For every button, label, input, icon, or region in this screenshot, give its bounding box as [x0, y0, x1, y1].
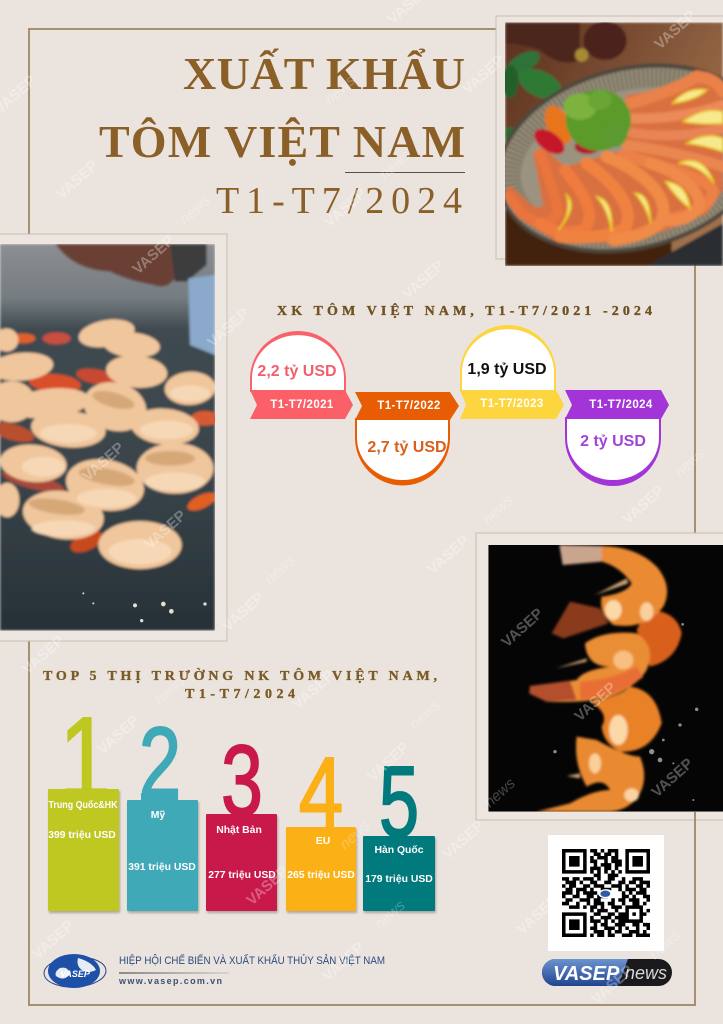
bar 3: 277 triệu USD	[208, 870, 276, 881]
watermarks: VASEP	[321, 185, 370, 231]
bar 2	[127, 707, 198, 911]
bar 5	[363, 746, 435, 911]
title underline	[345, 172, 465, 173]
bar 1: 1	[59, 694, 111, 823]
watermarks: VASEP	[141, 507, 190, 553]
heading: export value: XK TÔM VIỆT NAM, T1-T7/2021 -2024	[277, 302, 652, 319]
bar 4: 265 triệu USD	[287, 870, 355, 881]
footer: website: www.vasep.com.vn	[118, 976, 222, 986]
watermarks: VASEP	[364, 739, 413, 785]
badge 2021: 2,2 tỷ USD	[257, 363, 337, 380]
watermarks: VASEP	[53, 157, 102, 203]
bar 3: Nhật Bản	[216, 825, 262, 836]
bar 5: Hàn Quốc	[374, 844, 424, 856]
bar 2: Mỹ	[151, 810, 165, 821]
bar 1: Trung Quốc&HK	[48, 799, 118, 811]
watermarks: VASEP	[459, 52, 508, 98]
footer: divider	[119, 972, 229, 974]
heading: top 5 markets: T1-T7/2024	[185, 687, 295, 702]
badge 2021	[250, 331, 353, 419]
badge 2023	[460, 325, 564, 419]
title	[99, 47, 465, 167]
photo: shrimp skewer	[488, 545, 723, 812]
panel: top right photo frame	[496, 16, 723, 300]
watermarks: news	[336, 817, 374, 853]
watermarks: VASEP	[399, 257, 448, 303]
timeline chart	[250, 325, 669, 486]
logo: VASEP association: VASEP	[60, 969, 91, 979]
watermarks: VASEP	[588, 962, 637, 1008]
watermarks: VASEP	[513, 892, 562, 938]
bar 1: 399 triệu USD	[48, 830, 116, 841]
badge 2024: 2 tỷ USD	[580, 433, 646, 450]
logo: VASEP association	[43, 954, 107, 989]
watermarks: news	[151, 672, 189, 708]
badge 2023: 1,9 tỷ USD	[467, 361, 547, 378]
watermarks: VASEP	[219, 589, 268, 635]
watermarks: VASEP	[204, 305, 253, 351]
bar 3: 3	[221, 724, 263, 836]
watermarks: news	[406, 697, 444, 733]
badge 2024: T1-T7/2024	[589, 399, 653, 411]
panel: bottom right photo frame	[476, 533, 723, 850]
badge 2022: 2,7 tỷ USD	[367, 439, 447, 456]
badge 2024	[565, 390, 669, 486]
watermarks: news	[671, 445, 709, 481]
watermarks: VASEP	[19, 632, 68, 678]
watermarks: VASEP	[651, 7, 700, 53]
watermarks: VASEP	[498, 605, 547, 651]
panel: griddle photo frame	[0, 234, 227, 641]
bar 2: 2	[139, 707, 181, 818]
bar 1	[48, 694, 119, 911]
QR code	[548, 835, 664, 951]
watermarks: VASEP	[94, 712, 143, 758]
watermarks: VASEP	[319, 939, 368, 985]
logo: VASEP news badge: VASEP	[553, 963, 620, 985]
watermarks: VASEP	[424, 532, 473, 578]
badge 2022: T1-T7/2022	[377, 400, 441, 412]
watermarks: VASEP	[243, 863, 292, 909]
bar 5: 179 triệu USD	[365, 874, 433, 885]
watermarks: VASEP	[29, 917, 78, 963]
footer: association name: HIỆP HỘI CHẾ BIẾN VÀ XUẤT KHẨU THỦY SẢN VIỆT NAM	[119, 954, 385, 967]
badge 2021: T1-T7/2021	[270, 399, 334, 411]
photo: grilled shrimp	[0, 244, 219, 631]
watermarks: VASEP	[79, 439, 128, 485]
logo: VASEP news badge: news	[625, 963, 667, 983]
photo: shrimp platter	[505, 22, 723, 266]
bar 3	[206, 724, 277, 911]
bar 4: 4	[299, 738, 343, 849]
bar 2: 391 triệu USD	[128, 862, 196, 873]
watermarks: VASEP	[129, 232, 178, 278]
bar 4	[286, 738, 356, 911]
watermarks: news	[261, 552, 299, 588]
badge 2023: T1-T7/2023	[480, 398, 544, 410]
bar 5: 5	[379, 746, 419, 858]
logo: VASEP news badge	[542, 959, 672, 986]
badge 2022	[355, 392, 459, 486]
bar chart: top 5 markets	[48, 694, 435, 911]
watermarks: VASEP	[619, 482, 668, 528]
heading: top 5 markets	[43, 667, 437, 702]
watermarks: VASEP	[439, 817, 488, 863]
watermarks: VASEP	[289, 667, 338, 713]
watermarks: news	[321, 72, 359, 108]
watermarks: VASEP	[571, 679, 620, 725]
bar 4: EU	[316, 836, 330, 847]
watermarks: VASEP	[648, 755, 697, 801]
watermarks: news	[371, 897, 409, 933]
subtitle: period: T1-T7/2024	[216, 180, 462, 222]
watermarks: news	[376, 147, 414, 183]
watermarks: news	[479, 492, 517, 528]
title: XUẤT KHẨU	[183, 47, 465, 99]
watermarks: news	[481, 775, 519, 811]
title: TÔM VIỆT NAM	[99, 116, 465, 167]
heading: top 5 markets: TOP 5 THỊ TRƯỜNG NK TÔM VIỆT NAM,	[43, 667, 437, 684]
watermarks: news	[646, 927, 684, 963]
watermarks: news	[176, 192, 214, 228]
